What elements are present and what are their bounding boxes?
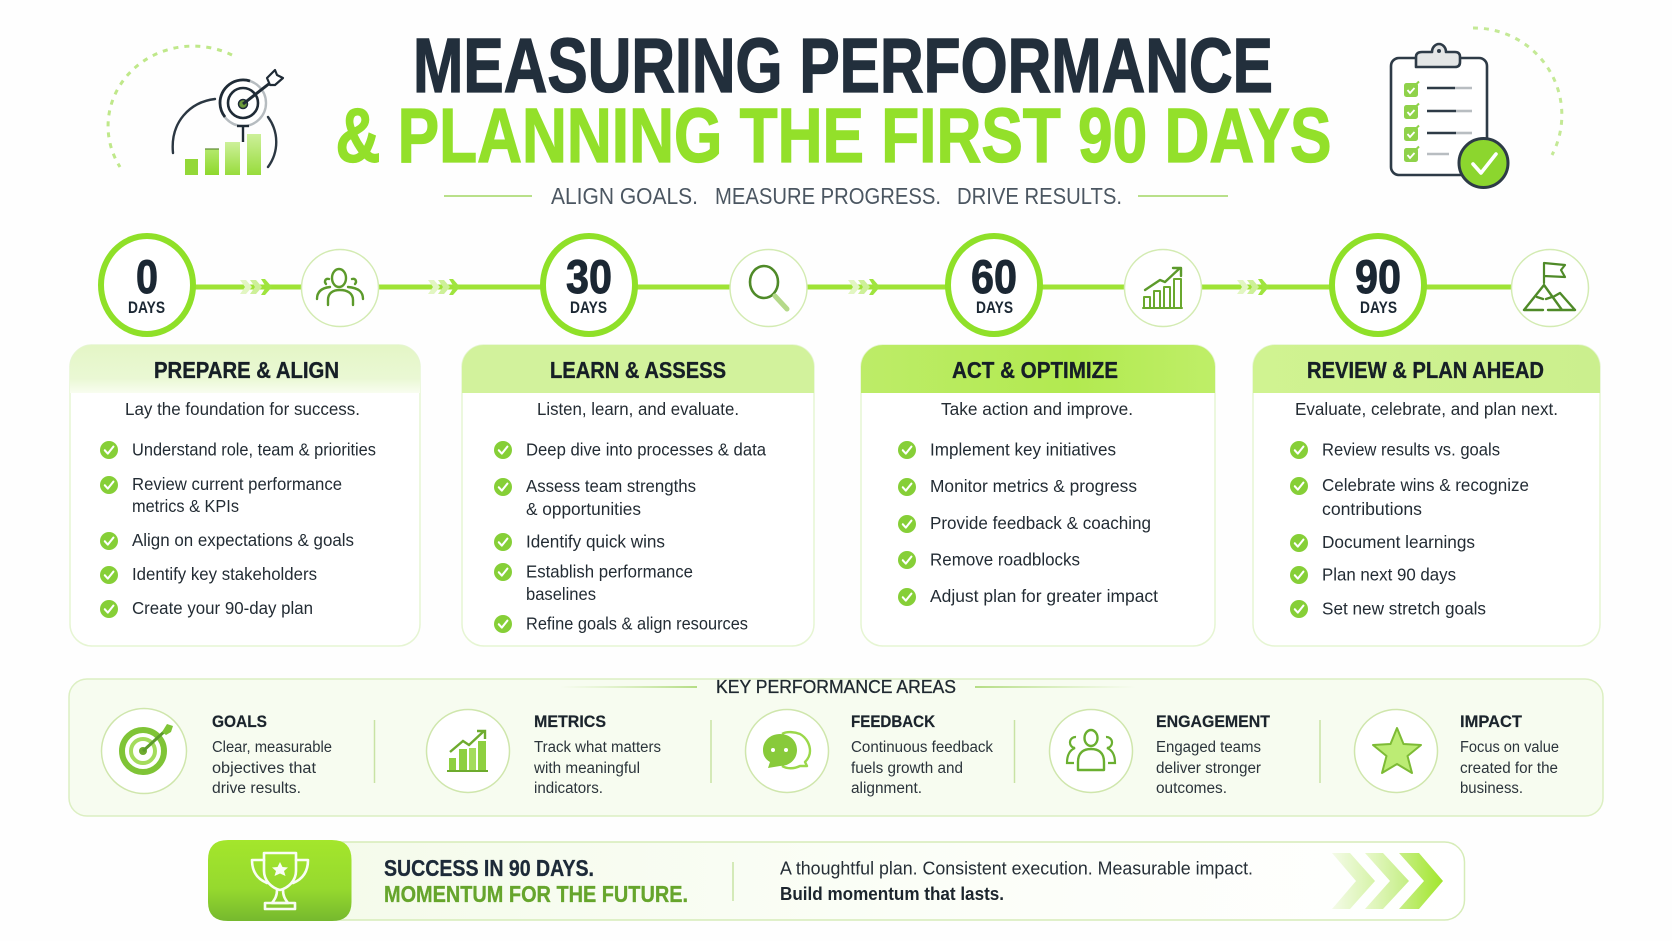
checklist: [898, 440, 1158, 606]
tagline: Evaluate, celebrate, and plan next.: [1295, 399, 1558, 419]
milestone: 30 days: 30: [566, 250, 612, 303]
checklist: Align on expectations & goals: [132, 530, 354, 550]
banner headline: [384, 855, 688, 907]
subtitle: ALIGN GOALS.: [551, 183, 698, 209]
title: & PLANNING THE FIRST 90 DAYS: [336, 93, 1332, 179]
checklist: [100, 440, 376, 618]
timeline: [101, 236, 1588, 334]
item: feedback: Continuous feedback: [851, 739, 993, 756]
checklist: [494, 440, 766, 634]
panel: learn and assess: [462, 345, 814, 646]
section heading: KEY PERFORMANCE AREAS: [716, 676, 956, 697]
milestone: 90 days: [1332, 236, 1424, 334]
item: engagement: [1050, 710, 1271, 797]
item: goals: drive results.: [212, 780, 301, 797]
milestone: 0 days: DAYS: [128, 299, 165, 317]
checklist: Review current performance: [132, 474, 342, 494]
milestone: 30 days: DAYS: [570, 299, 607, 317]
item: metrics: indicators.: [534, 780, 603, 797]
checklist: Plan next 90 days: [1322, 564, 1456, 584]
banner headline: SUCCESS IN 90 DAYS.: [384, 855, 594, 881]
checklist: baselines: [526, 584, 596, 604]
item: impact: Focus on value: [1460, 739, 1559, 756]
arrow 3: [848, 279, 880, 295]
item: engagement: outcomes.: [1156, 780, 1227, 797]
card header: [861, 345, 1215, 393]
arrow: chevrons: [1332, 853, 1443, 909]
panel: review and plan ahead: [1253, 345, 1600, 646]
item: metrics: Track what matters: [534, 739, 661, 756]
banner headline: MOMENTUM FOR THE FUTURE.: [384, 881, 688, 907]
item: engagement: ENGAGEMENT: [1156, 712, 1271, 731]
item: goals: objectives that: [212, 760, 317, 777]
banner message: Build momentum that lasts.: [780, 883, 1004, 904]
item: impact: business.: [1460, 780, 1523, 797]
title: MEASURING PERFORMANCE: [413, 23, 1273, 109]
checklist: Understand role, team & priorities: [132, 440, 376, 460]
checklist: Document learnings: [1322, 532, 1475, 552]
icon: growth chart: [1124, 250, 1202, 326]
checklist: Deep dive into processes & data: [526, 440, 766, 460]
milestone: 60 days: DAYS: [976, 299, 1013, 317]
card header: [1253, 345, 1600, 393]
item: impact: created for the: [1460, 760, 1558, 777]
milestone: 60 days: [948, 236, 1040, 334]
arrow 4: [1237, 279, 1269, 295]
arrow 2: [428, 279, 460, 295]
icon: target and growth bars: [108, 46, 283, 175]
checklist: Create your 90-day plan: [132, 598, 313, 618]
checklist: Adjust plan for greater impact: [930, 586, 1158, 606]
item: impact: IMPACT: [1460, 712, 1523, 731]
panel: act and optimize: [861, 345, 1215, 646]
milestone: 0 days: 0: [136, 250, 158, 303]
item: engagement: Engaged teams: [1156, 739, 1261, 756]
icon: people: [302, 250, 378, 326]
checklist: [1290, 440, 1529, 618]
checklist: Implement key initiatives: [930, 440, 1116, 460]
checklist: Identify key stakeholders: [132, 564, 317, 584]
icon: clipboard checklist: [1391, 28, 1562, 188]
checklist: Establish performance: [526, 562, 693, 582]
arrow 1: [240, 279, 272, 295]
checklist: Review results vs. goals: [1322, 440, 1500, 460]
icon: magnifying glass: [730, 250, 807, 326]
milestone: 60 days: 60: [971, 250, 1017, 303]
item: goals: GOALS: [212, 712, 267, 731]
checklist: Celebrate wins & recognize: [1322, 475, 1529, 495]
tagline: Lay the foundation for success.: [125, 399, 360, 419]
card header: [462, 345, 814, 393]
callout: success banner: [208, 840, 1464, 921]
item: engagement: deliver stronger: [1156, 760, 1261, 777]
item: goals: [102, 708, 332, 797]
heading: LEARN & ASSESS: [550, 357, 726, 383]
panel: prepare and align: [70, 345, 420, 646]
checklist: Provide feedback & coaching: [930, 513, 1151, 533]
milestone: 90 days: 90: [1355, 250, 1401, 303]
heading: PREPARE & ALIGN: [154, 357, 339, 383]
banner message: [780, 858, 1253, 904]
banner message: A thoughtful plan. Consistent execution. Measurable impact.: [780, 858, 1253, 878]
checklist: Refine goals & align resources: [526, 614, 748, 634]
tagline: Take action and improve.: [941, 399, 1133, 419]
tagline: Listen, learn, and evaluate.: [537, 399, 739, 419]
icon: trophy: [252, 853, 308, 909]
heading: REVIEW & PLAN AHEAD: [1307, 357, 1544, 383]
item: goals: Clear, measurable: [212, 739, 332, 756]
item: feedback: fuels growth and: [851, 760, 963, 777]
title: [336, 23, 1332, 179]
checklist: Identify quick wins: [526, 532, 665, 552]
item: metrics: [426, 710, 661, 797]
item: metrics: METRICS: [534, 712, 606, 731]
checklist: Assess team strengths: [526, 476, 696, 496]
milestone: 30 days: [543, 236, 635, 334]
checklist: Monitor metrics & progress: [930, 476, 1137, 496]
checklist: Remove roadblocks: [930, 550, 1080, 570]
subtitle: MEASURE PROGRESS.: [715, 183, 941, 209]
item: feedback: FEEDBACK: [851, 712, 936, 731]
heading: ACT & OPTIMIZE: [952, 357, 1118, 383]
checklist: contributions: [1322, 499, 1422, 519]
icon: mountain flag: [1512, 250, 1588, 326]
checklist: metrics & KPIs: [132, 496, 239, 516]
item: feedback: alignment.: [851, 780, 922, 797]
item: metrics: with meaningful: [533, 760, 640, 777]
milestone: 90 days: DAYS: [1360, 299, 1397, 317]
trophy block: [208, 840, 352, 921]
checklist: Set new stretch goals: [1322, 598, 1486, 618]
subtitle: [444, 183, 1228, 209]
item: impact: [1354, 710, 1559, 797]
checklist: & opportunities: [526, 499, 641, 519]
milestone: 0 days: [101, 236, 193, 334]
subtitle: DRIVE RESULTS.: [957, 183, 1122, 209]
card header: [70, 345, 420, 393]
item: feedback: [746, 710, 993, 797]
panel: key performance areas: [69, 676, 1603, 816]
